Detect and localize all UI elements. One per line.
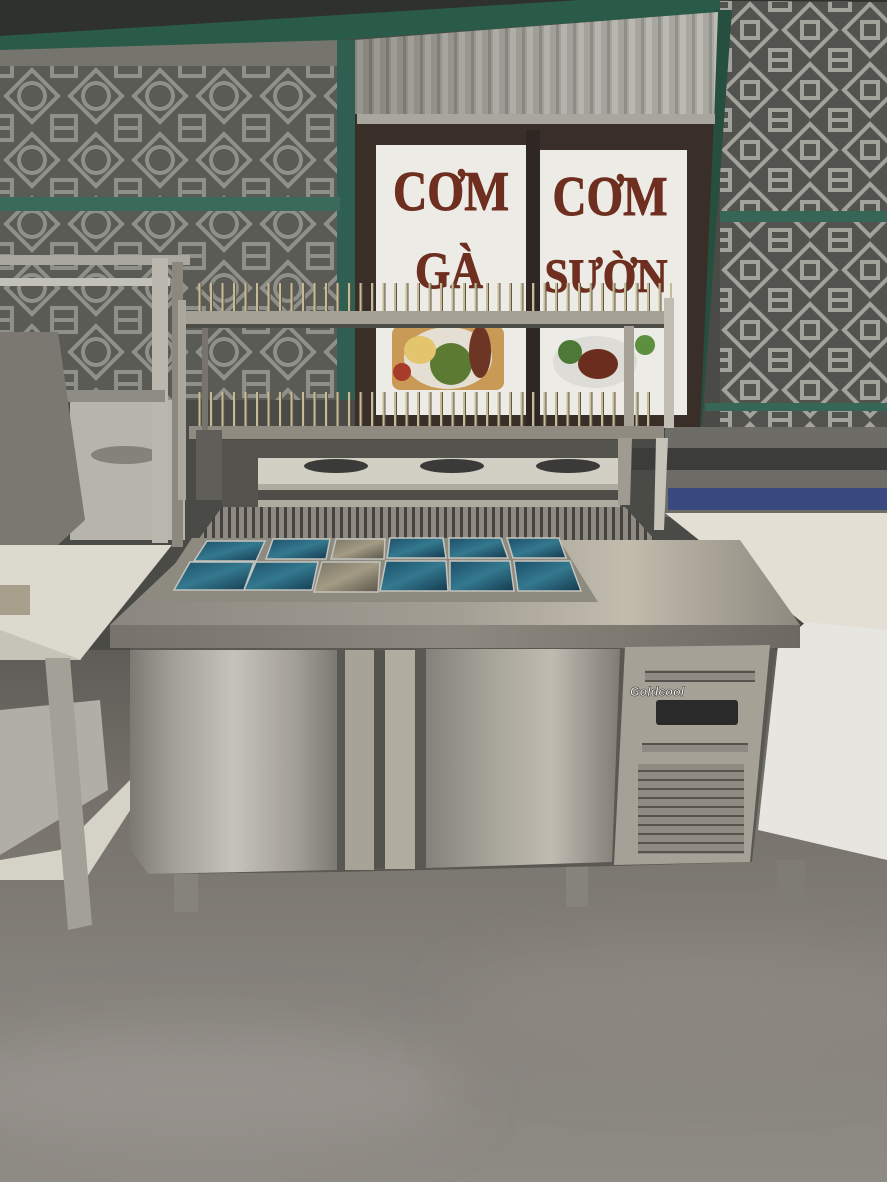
sign panel: com suon: SƯỜN: [544, 249, 668, 303]
right stove and white counter: [632, 427, 887, 902]
sign panel: com suon: CƠM: [552, 166, 668, 228]
control display: [656, 700, 738, 725]
sign panel: com ga: CƠM: [393, 161, 509, 223]
pan well frame: [150, 538, 598, 602]
counter top: [110, 540, 800, 625]
lower vents: [638, 764, 744, 854]
refrigerated prep counter: [110, 283, 800, 912]
top vents: [645, 670, 755, 682]
sign panel: com ga: GÀ: [415, 242, 483, 300]
sign panel: com ga: [376, 145, 526, 415]
right fridge door: [426, 649, 620, 868]
compressor panel: [614, 645, 770, 865]
wall background: [0, 0, 887, 700]
floor: [0, 650, 887, 1182]
slatted rail: [198, 507, 655, 540]
middle vents: [642, 743, 748, 752]
body underside: [130, 648, 775, 874]
counter legs: [174, 862, 588, 912]
roof beam: [0, 0, 887, 66]
corrugated metal panel: [355, 12, 718, 122]
rack: [178, 283, 674, 530]
counter front edge: [110, 625, 800, 648]
gastronorm pans: [174, 538, 581, 592]
white counter: [665, 513, 887, 630]
sign: restaurant menu board: [355, 114, 715, 430]
brand logo: Goldcool: [630, 685, 685, 699]
sign panel: com suon: [540, 150, 687, 415]
left fridge door: [130, 650, 337, 874]
stove range behind counter: [222, 440, 622, 518]
door handles: [345, 650, 415, 870]
green wall posts: [0, 10, 887, 425]
left shelf and steel cabinet: [0, 255, 190, 930]
